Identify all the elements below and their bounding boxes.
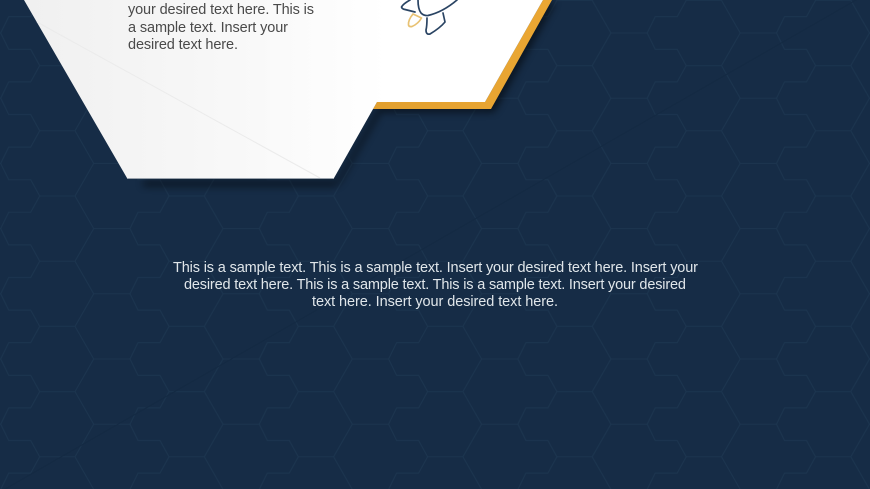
text block: card description: a sample text. Insert your [128, 20, 288, 36]
gold hexagon frame [373, 0, 552, 109]
text block: card description: desired text here. [128, 37, 238, 53]
text block: card description: your desired text here. This is [128, 2, 314, 18]
panel: cropped hexagon cards [24, 0, 555, 186]
icon: rocket bottom [402, 0, 457, 34]
text block: summary paragraph: desired text here. This is a sample text. This is a sample text. Insert your desired [184, 277, 686, 293]
text block: summary paragraph [173, 260, 698, 310]
text block: summary paragraph: text here. Insert your desired text here. [312, 294, 558, 310]
text block: summary paragraph: This is a sample text. This is a sample text. Insert your desired text here. Insert your [173, 260, 698, 276]
white hexagon card [24, 0, 543, 178]
text block: card description [128, 0, 314, 53]
